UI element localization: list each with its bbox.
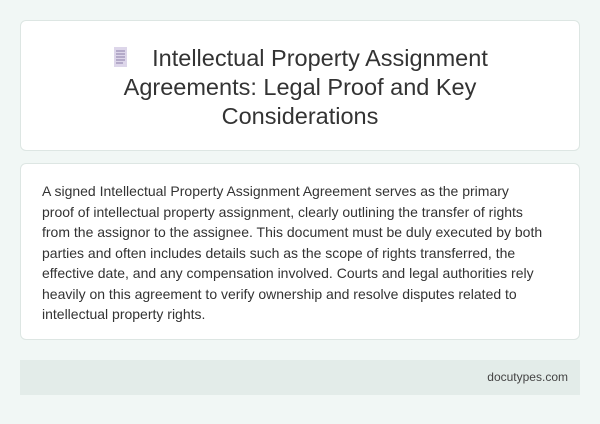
icon: document xyxy=(114,47,127,67)
body text card xyxy=(20,163,580,340)
footer: docutypes.com xyxy=(487,370,568,384)
description: A signed Intellectual Property Assignment Agreement serves as the primary proof of intellectual property assignment, clearly outlining the transfer of rights from the assignor to the assignee. This document must be duly executed by both parties and often includes details such as the scope of rights transferred, the effective date, and any compensation involved. Courts and legal authorities rely heavily on this agreement to verify ownership and resolve disputes related to intellectual property rights. xyxy=(42,183,542,322)
title card xyxy=(20,20,580,151)
footer xyxy=(20,360,580,395)
title: Intellectual Property Assignment Agreements: Legal Proof and Key Considerations xyxy=(124,45,488,129)
